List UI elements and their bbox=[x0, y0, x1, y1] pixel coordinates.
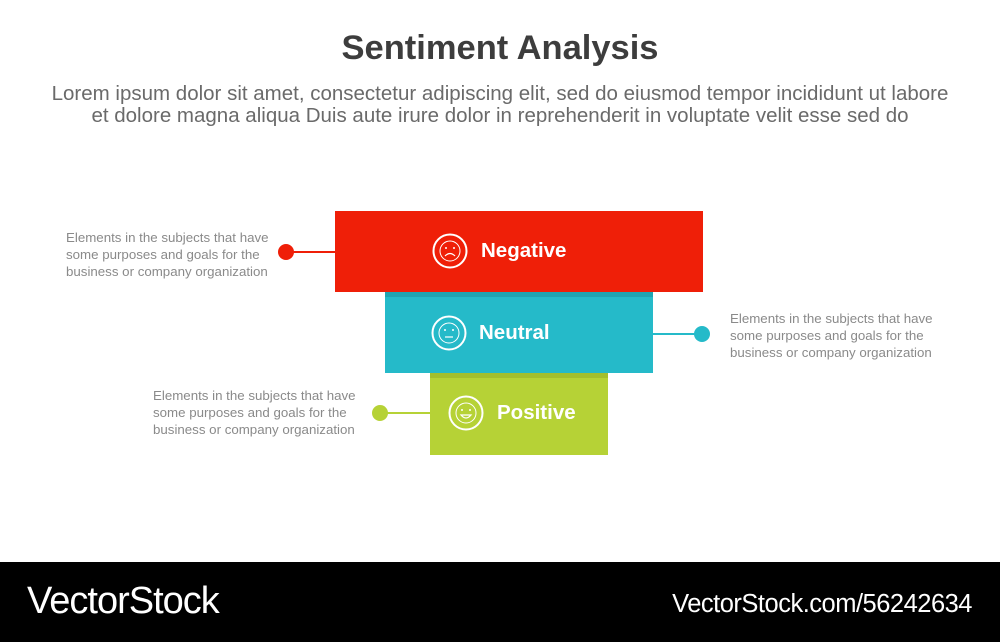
bar: positive bbox=[430, 373, 608, 455]
footer bbox=[0, 562, 1000, 642]
subtitle: et dolore magna aliqua Duis aute irure dolor in reprehenderit in voluptate velit esse sed do bbox=[91, 104, 909, 127]
label: positive: Positive bbox=[497, 401, 576, 424]
connector: negative bbox=[278, 244, 335, 260]
connector: positive bbox=[372, 405, 430, 421]
text: positive bbox=[153, 388, 356, 437]
bar: negative bbox=[335, 211, 703, 292]
text: negative: Elements in the subjects that have bbox=[66, 230, 269, 245]
subtitle: Lorem ipsum dolor sit amet, consectetur adipiscing elit, sed do eiusmod tempor incididunt ut labore bbox=[52, 82, 948, 105]
title: Sentiment Analysis bbox=[342, 29, 658, 67]
footer logo: VectorStock bbox=[27, 580, 219, 622]
label: negative: Negative bbox=[481, 239, 566, 262]
text: positive: Elements in the subjects that have bbox=[153, 388, 356, 403]
label: neutral: Neutral bbox=[479, 321, 550, 344]
connector: neutral bbox=[653, 326, 710, 342]
bar: neutral bbox=[385, 292, 653, 373]
text: neutral: Elements in the subjects that have bbox=[730, 311, 933, 326]
text: neutral: business or company organization bbox=[730, 345, 932, 360]
text: negative bbox=[66, 230, 269, 279]
footer url: VectorStock.com/56242634 bbox=[672, 590, 972, 618]
text: positive: some purposes and goals for the bbox=[153, 405, 347, 420]
text: neutral bbox=[730, 311, 933, 360]
text: neutral: some purposes and goals for the bbox=[730, 328, 924, 343]
text: positive: business or company organization bbox=[153, 422, 355, 437]
subtitle bbox=[52, 82, 948, 127]
text: negative: business or company organization bbox=[66, 264, 268, 279]
text: negative: some purposes and goals for the bbox=[66, 247, 260, 262]
